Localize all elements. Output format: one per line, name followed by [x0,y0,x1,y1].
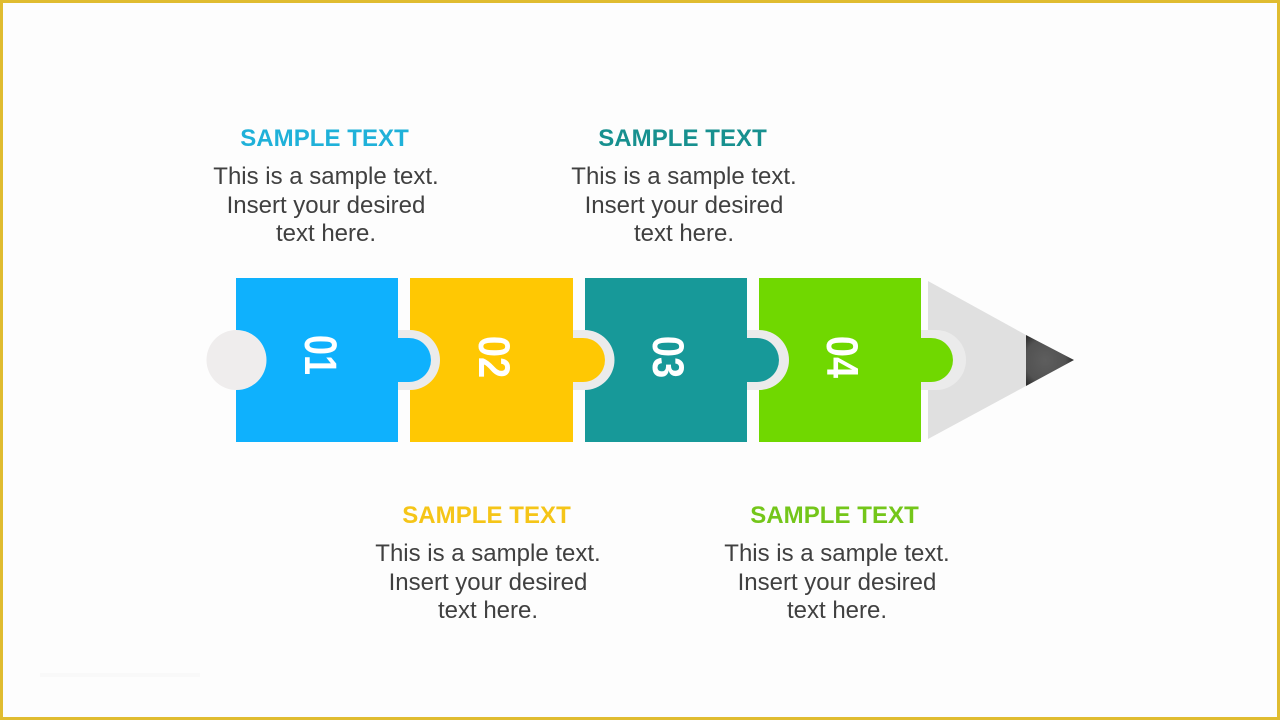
puzzle piece 01 [236,278,440,442]
puzzle piece 03: 03 [643,336,694,378]
text block 2: text here. [438,597,538,624]
text block 1: This is a sample text. [213,163,439,190]
text block 2: This is a sample text. [375,540,601,567]
puzzle piece 03 [585,278,789,442]
text block 3 [571,124,797,247]
text block 4: SAMPLE TEXT [750,502,919,528]
text block 4: Insert your desired [738,568,936,596]
text block 3: Insert your desired [585,192,783,218]
puzzle piece 01: 01 [295,335,346,375]
text block 2: Insert your desired [389,568,587,596]
text block 4: text here. [787,597,887,624]
pencil body [928,281,1026,439]
text block 2: SAMPLE TEXT [402,502,571,528]
text block 3: text here. [634,220,734,247]
text block 3: SAMPLE TEXT [598,124,767,152]
text block 4: This is a sample text. [724,540,950,567]
pencil tip [1026,335,1074,386]
puzzle piece 02 [410,278,614,442]
text block 2 [375,502,601,624]
puzzle piece 04 [759,278,966,442]
text block 1: Insert your desired [227,192,425,218]
left socket circle [206,330,266,390]
text block 4 [724,502,950,624]
text block 1: SAMPLE TEXT [240,124,409,152]
text block 1 [213,124,439,247]
puzzle piece 02: 02 [469,336,520,378]
text block 1: text here. [276,220,376,247]
text block 3: This is a sample text. [571,163,797,190]
puzzle piece 04: 04 [817,336,868,378]
